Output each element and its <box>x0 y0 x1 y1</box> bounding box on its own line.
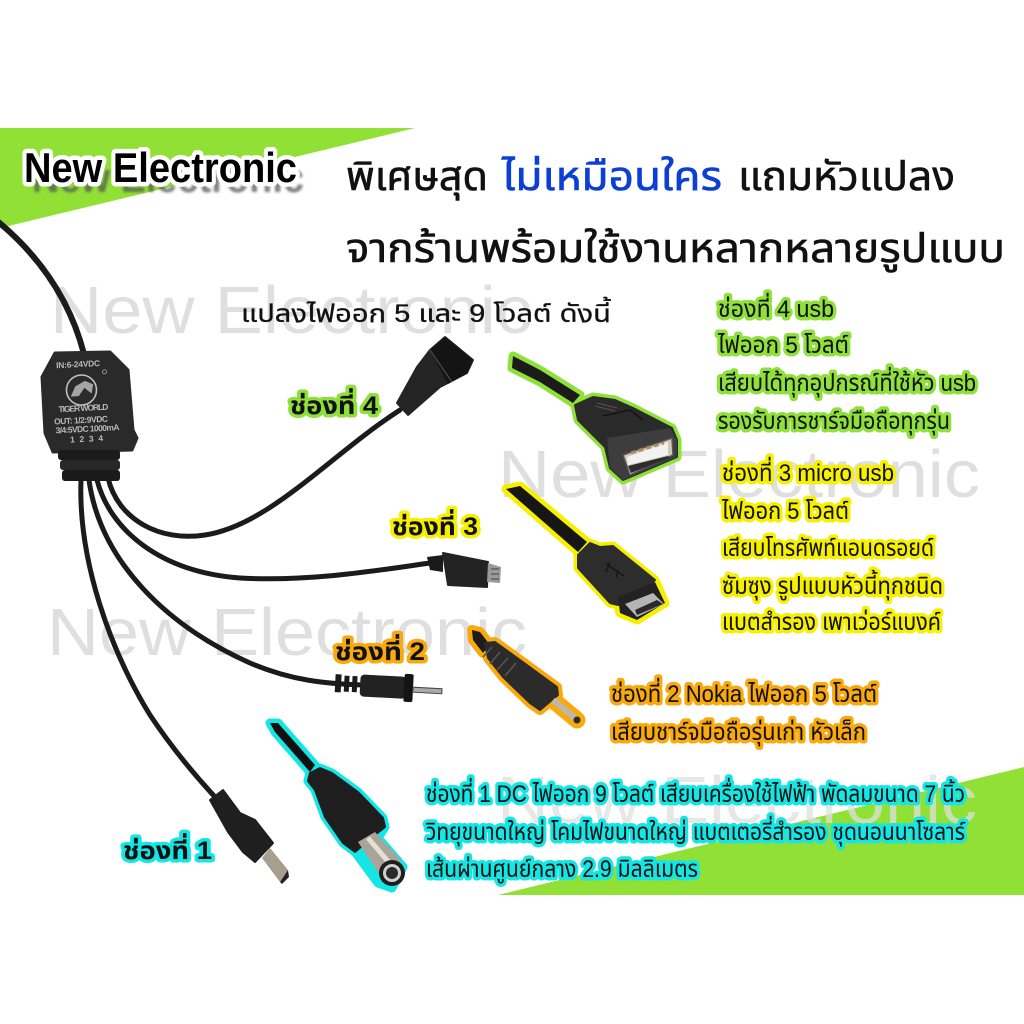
port labels <box>123 388 478 865</box>
description: port 3 <box>721 456 943 636</box>
cable to port 4 <box>108 410 400 536</box>
description: port 2: เสียบชาร์จมือถือรุ่นเก่า หัวเล็ก <box>611 718 866 747</box>
watermarks: New Electronic <box>47 595 527 670</box>
description: port 2: ช่องที่ 2 Nokia ไฟออก 5 โวลต์ <box>611 677 877 708</box>
green banner bottom right <box>498 767 1024 895</box>
brand logo text: New Electronic <box>24 144 297 191</box>
watermarks: New Electronic <box>498 437 980 512</box>
small micro usb plug <box>427 553 501 587</box>
description: port 1: เส้นผ่านศูนย์กลาง 2.9 มิลลิเมตร <box>426 855 698 884</box>
description: port 3: ช่องที่ 3 micro usb <box>722 456 894 487</box>
small nokia plug <box>334 670 443 704</box>
description: port 4: ช่องที่ 4 usb <box>718 292 834 323</box>
brand logo text: New Electronic <box>32 154 304 201</box>
description: port 3: ไฟออก 5 โวลต์ <box>721 498 849 525</box>
splitter box: IN:6-24VDC <box>56 358 100 370</box>
input cable <box>0 220 84 354</box>
photo: dc connector <box>270 723 405 888</box>
description: port 4: รองรับการชาร์จมือถือทุกรุ่น <box>718 407 950 436</box>
description: port 1 <box>425 777 966 884</box>
splitter box: OUT: 1/2:9VDC <box>54 414 108 426</box>
port labels: ช่องที่ 3 <box>392 509 478 541</box>
watermarks: New Electronic <box>50 273 532 348</box>
splitter box: TIGER WORLD <box>58 402 109 414</box>
description: port 3: เสียบโทรศัพท์แอนดรอยด์ <box>722 535 934 562</box>
splitter box: 1 2 3 4 <box>70 433 104 445</box>
cable to port 3 <box>97 480 430 579</box>
watermarks: New Electronic <box>497 763 977 838</box>
photo: nokia connector <box>472 630 580 724</box>
port labels: ช่องที่ 2 <box>335 634 425 666</box>
green banner top left <box>0 128 415 228</box>
subtitle: แปลงไฟออก 5 และ 9 โวลต์ ดังนี้ <box>241 296 611 328</box>
cable to port 2 <box>89 480 364 685</box>
description: port 4 <box>717 292 976 436</box>
description: port 2 <box>611 677 877 747</box>
description: port 1: วิทยุขนาดใหญ่ โคมไฟขนาดใหญ่ แบตเตอรี่สำรอง ชุดนอนนาโซลาร์ <box>425 815 966 847</box>
splitter box <box>42 352 137 481</box>
watermarks <box>47 273 980 838</box>
title: พิเศษสุด <box>346 155 488 200</box>
description: port 4: ไฟออก 5 โวลต์ <box>717 332 849 359</box>
photo: micro usb connector <box>506 486 665 620</box>
description: port 3: ซัมซุง รูปแบบหัวนี้ทุกชนิด <box>722 569 943 601</box>
description: port 4: เสียบได้ทุกอุปกรณ์ที่ใช้หัว usb <box>718 366 976 398</box>
title: จากร้านพร้อมใช้งานหลากหลายรูปแบบ <box>346 227 1005 272</box>
photo: usb connector <box>512 356 677 480</box>
description: port 3: แบตสำรอง เพาเว่อร์แบงค์ <box>722 608 941 636</box>
cable to port 1 <box>81 480 215 797</box>
title: แถมหัวแปลง <box>738 155 955 199</box>
splitter box: 3/4:5VDC 1000mA <box>55 422 120 435</box>
small dc plug <box>210 790 289 884</box>
port labels: ช่องที่ 4 <box>290 388 378 420</box>
title: ไม่เหมือนใคร <box>501 155 722 199</box>
title <box>346 155 1005 272</box>
port labels: ช่องที่ 1 <box>123 833 212 865</box>
small usb plug <box>397 337 473 415</box>
